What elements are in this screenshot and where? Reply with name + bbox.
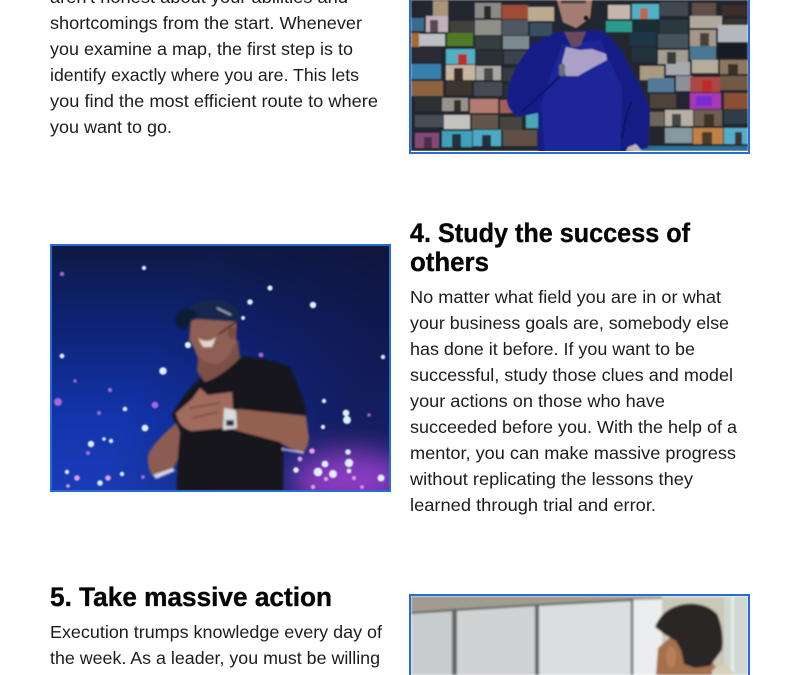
video tile mosaic [411,1,748,151]
text block: step 4 paragraph [409,287,737,515]
window mullions [411,599,632,614]
text block: step 3 closing paragraph: you want to go. [50,117,172,137]
text block: step 5 paragraph: the week. As a leader, you must be willing [50,648,380,668]
text block: step 3 closing paragraph: you examine a map, the first step is to [50,39,353,59]
heading: step 5: 5. Take massive action [50,582,332,612]
right wall and frame [662,597,724,675]
heading: step 4: others [410,247,489,277]
bokeh lights [54,266,385,489]
man: shirt, arm and hand [507,0,650,152]
photo: man facing a large window [410,595,749,675]
window panels [411,610,453,675]
tile figures [424,6,742,148]
head [656,636,722,675]
photo: speaker in blue shirt before a wall of video screens [410,0,749,153]
text block: step 4 paragraph: your actions on those who have [410,391,665,411]
heading: step 4: 4. Study the success of [410,218,691,248]
text block: step 4 paragraph: your business goals are, somebody else [410,313,729,333]
text block: step 3 closing paragraph: shortcomings from the start. Whenever [50,13,362,33]
text block: step 5 paragraph: Execution trumps knowledge every day of [50,622,382,642]
text block: step 4 paragraph: mentor, you can make massive progress [410,443,736,463]
text block: step 3 closing paragraph: you find the most efficient route to where [50,91,378,111]
photo: speaker in cap and black tee with hands on chest under stage lights [50,244,391,492]
text block: step 4 paragraph: succeeded before you. With the help of a [410,417,737,437]
text block: step 5 paragraph [50,622,382,668]
man in cap and black tee [148,299,309,491]
text block: step 4 paragraph: has done it before. If you want to be [410,339,695,359]
heading: step 4 [410,218,691,277]
text block: step 4 paragraph: successful, study those clues and model [410,365,733,385]
text block: step 3 closing paragraph [50,0,378,137]
text block: step 3 closing paragraph: identify exactly where you are. This lets [50,65,359,85]
purple stage glow [282,431,389,490]
text block: step 4 paragraph: without replicating the lessons they [409,469,693,489]
text block: step 4 paragraph: No matter what field you are in or what [410,287,721,307]
text block: step 4 paragraph: learned through trial and error. [410,495,656,515]
ceiling band [411,596,662,613]
